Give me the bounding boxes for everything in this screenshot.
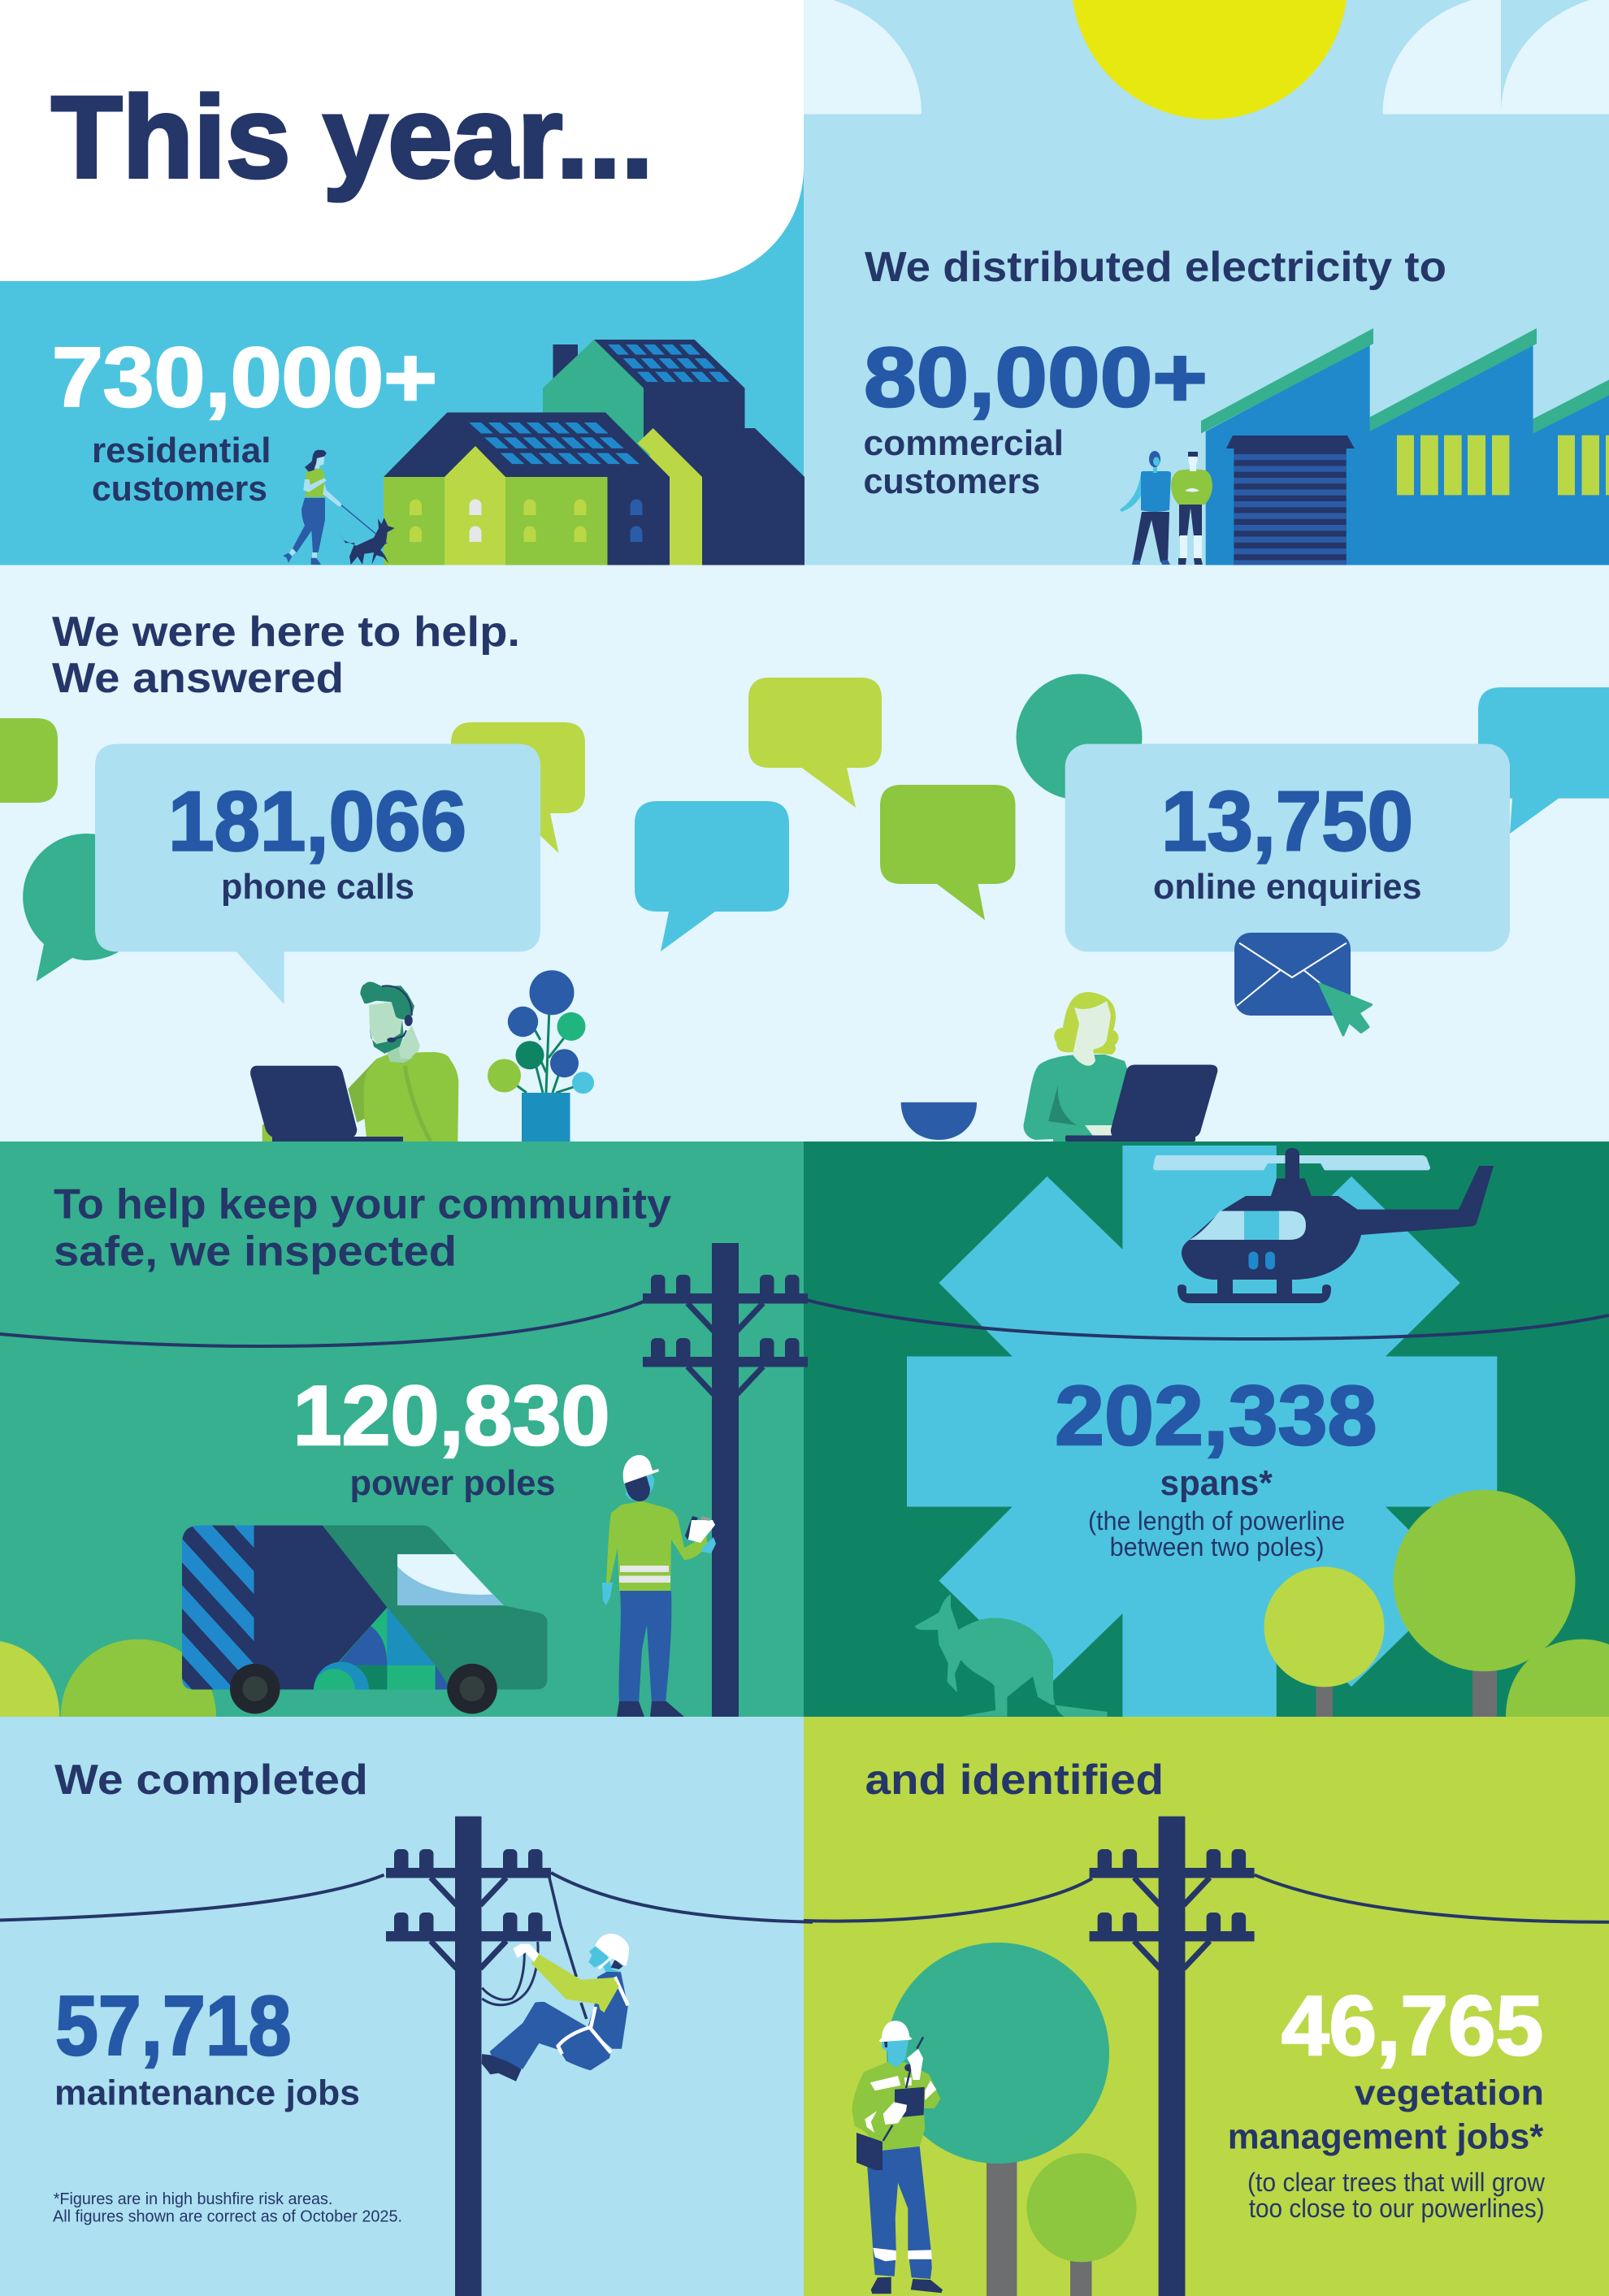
illustration: woman at laptop (1024, 992, 1217, 1142)
speech bubble: teal left (23, 834, 150, 981)
icon: cloud left (804, 0, 922, 114)
heading: we completed: We completed (54, 1757, 368, 1804)
power pole (643, 1243, 808, 1717)
illustration: two people (1120, 451, 1212, 565)
panel: vegetation management (804, 1717, 1609, 2296)
heading: we were here to help (52, 609, 520, 702)
background star shape (907, 1146, 1497, 1717)
speech bubble: teal circle (1016, 674, 1143, 799)
speech bubble: phone calls (95, 744, 540, 1004)
panel: customer contact (0, 565, 1609, 1142)
note: vegetation explanation (1247, 2168, 1546, 2223)
note: vegetation explanation: (to clear trees that will grow (1247, 2168, 1546, 2197)
speech bubble: cyan right (1478, 687, 1609, 834)
illustration: factory (1201, 328, 1609, 565)
speech bubble: cyan (635, 801, 789, 951)
power line (0, 1302, 644, 1346)
illustration: plant (488, 970, 594, 1142)
label: vegetation management jobs: management jobs* (1228, 2116, 1544, 2156)
panel: power poles inspected (0, 1142, 808, 1717)
power line (0, 1873, 813, 1922)
speech bubble: online enquiries (1065, 744, 1510, 952)
stat: 181,066: 181,066 (168, 775, 466, 869)
heading: and identified: and identified (865, 1757, 1164, 1804)
stat: 80,000+: 80,000+ (864, 331, 1208, 425)
illustration: trees (1264, 1490, 1609, 1717)
speech bubble: green left (0, 718, 58, 803)
title card (0, 0, 804, 281)
icon: envelope (1234, 933, 1351, 1016)
illustration: trees (887, 1943, 1136, 2296)
label: commercial customers: commercial (863, 423, 1064, 463)
icon: cloud right (1501, 0, 1609, 114)
footnote: *Figures are in high bushfire risk areas. (54, 2190, 332, 2208)
illustration: lineworker climbing (482, 1878, 629, 2082)
icon: cloud middle (1383, 0, 1501, 114)
heading: to help keep your community safe: To help keep your community (54, 1181, 671, 1228)
illustration: woman walking dog (283, 450, 395, 565)
illustration: helicopter (1153, 1148, 1494, 1303)
title: This year... (51, 73, 653, 202)
illustration: kangaroo (915, 1594, 1107, 1717)
illustration: worker with clipboard (602, 1455, 716, 1717)
footnote: All figures shown are correct as of October 2025. (53, 2208, 402, 2226)
heading: to help keep your community safe (54, 1181, 671, 1276)
power line (804, 1875, 1609, 1922)
label: vegetation management jobs: vegetation (1355, 2073, 1544, 2112)
stat: 13,750: 13,750 (1161, 775, 1413, 869)
speech bubble: green middle (880, 785, 1016, 920)
label: residential customers: residential (92, 431, 271, 470)
stat: 730,000+: 730,000+ (52, 331, 437, 425)
stat: 57,718: 57,718 (55, 1979, 291, 2073)
label: residential customers: customers (92, 469, 267, 509)
label: online enquiries: online enquiries (1153, 867, 1422, 907)
speech bubble: lime top (748, 678, 882, 808)
power line (806, 1300, 1609, 1339)
label: spans: spans* (1160, 1463, 1273, 1503)
icon: sun (1071, 0, 1347, 119)
stat: 46,765: 46,765 (1282, 1979, 1543, 2073)
illustration: shrubs (0, 1640, 216, 1717)
label: commercial customers (863, 423, 1064, 501)
panel: residential customers (0, 0, 804, 565)
label: residential customers (92, 431, 271, 509)
heading: we were here to help: We answered (52, 655, 344, 702)
illustration: man with headset (250, 982, 458, 1142)
label: vegetation management jobs (1228, 2073, 1544, 2156)
power pole (1090, 1817, 1255, 2296)
icon: cursor arrow (1320, 984, 1372, 1035)
power pole (386, 1817, 551, 2296)
note: span definition: (the length of powerline (1088, 1506, 1345, 1536)
illustration: houses (384, 340, 804, 565)
note: vegetation explanation: too close to our powerlines) (1249, 2194, 1545, 2223)
illustration: worker with tablet (852, 2021, 943, 2294)
label: maintenance jobs: maintenance jobs (54, 2073, 360, 2112)
icon: bowl (901, 1103, 977, 1140)
heading: we were here to help: We were here to help. (52, 609, 520, 656)
heading: to help keep your community safe: safe, we inspected (54, 1228, 457, 1276)
panel: commercial customers (804, 0, 1609, 565)
note: span definition (1088, 1506, 1345, 1562)
label: power poles: power poles (349, 1463, 556, 1503)
label: phone calls: phone calls (221, 867, 414, 907)
note: span definition: between two poles) (1110, 1532, 1325, 1562)
panel: spans inspected (804, 1142, 1609, 1717)
stat: 202,338: 202,338 (1055, 1369, 1377, 1463)
illustration: van (182, 1526, 548, 1714)
heading: we distributed electricity to: We distributed electricity to (865, 244, 1446, 291)
speech bubble: lime behind (451, 722, 585, 853)
footnote (53, 2190, 402, 2226)
stat: 120,830: 120,830 (293, 1369, 609, 1463)
label: commercial customers: customers (863, 461, 1040, 501)
panel: maintenance jobs (0, 1717, 813, 2296)
